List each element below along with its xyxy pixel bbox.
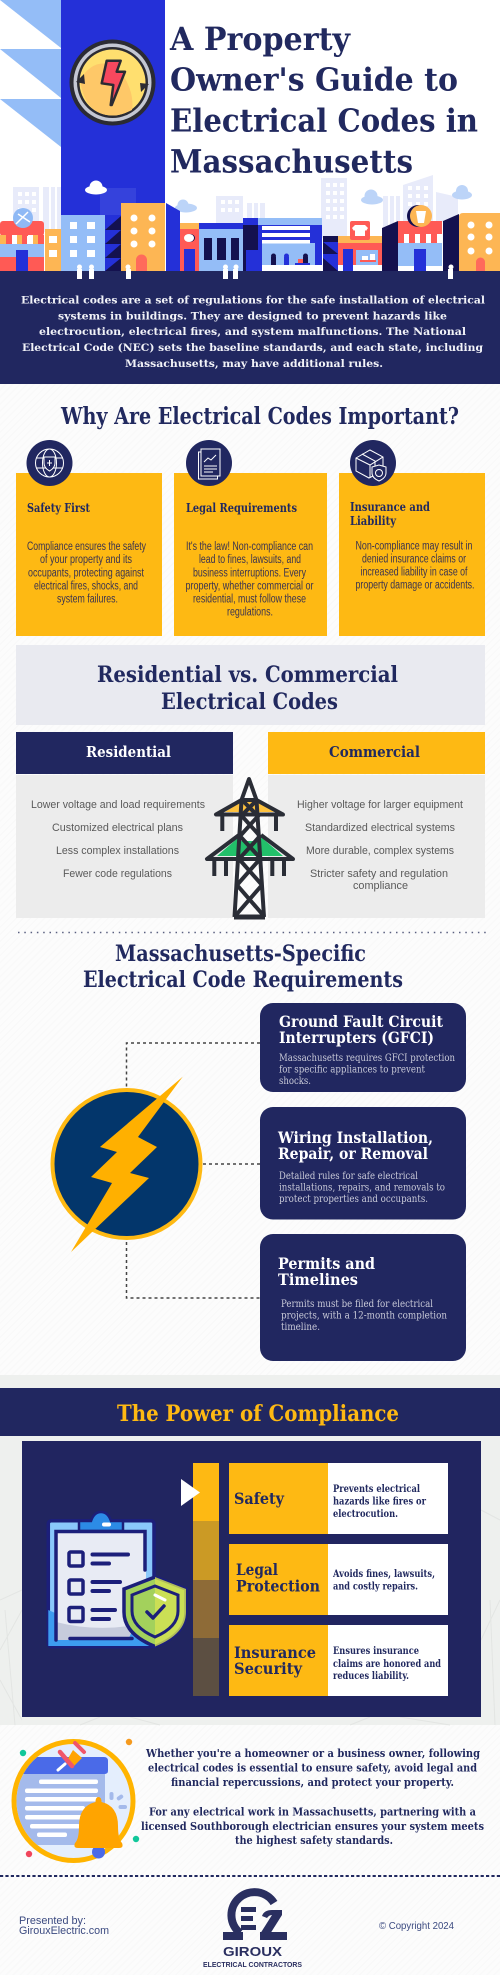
panel: wiring: Wiring Installation,	[277, 1128, 433, 1147]
intro band: Electrical Code (NEC) sets the baseline standards, and each state, including	[22, 342, 484, 354]
heading band: the power of compliance: The Power of Compliance	[117, 1401, 399, 1427]
row: legal protection: Protection	[236, 1576, 320, 1596]
row: insurance security	[229, 1625, 448, 1696]
panel: legal requirements: regulations.	[227, 607, 273, 619]
intro band: electrocution, electrical fires, and system malfunctions. The National	[39, 326, 466, 338]
orange right	[459, 213, 500, 271]
row: legal protection: Avoids fines, lawsuits,	[332, 1569, 435, 1580]
panel: GFCI: Interrupters (GFCI)	[279, 1028, 434, 1047]
panel: legal requirements: lead to fines, lawsuits, and	[199, 554, 301, 566]
title: Electrical Codes in	[170, 102, 478, 140]
panel: wiring: Detailed rules for safe electrical	[279, 1171, 418, 1182]
icon: clipboard with shield	[48, 1512, 186, 1647]
panel: residential vs commercial heading: Electrical Codes	[161, 689, 338, 715]
panel: safety first: electrical fires, shocks, and	[34, 580, 138, 592]
panel: residential vs commercial heading	[16, 645, 485, 725]
heading: massachusetts-specific: Electrical Code Requirements	[83, 967, 403, 993]
panel: wiring: protect properties and occupants.	[279, 1194, 428, 1205]
panel: wiring: Repair, or Removal	[278, 1144, 428, 1163]
panel: safety first	[16, 440, 162, 636]
panel: safety first: system failures.	[57, 594, 118, 606]
panel: commercial list: Commercial	[329, 743, 420, 761]
panel: residential list: Less complex installations	[56, 845, 179, 857]
intro band: Massachusetts, may have additional rules.	[125, 358, 383, 370]
shop 3	[398, 221, 442, 236]
panel: insurance and liability: Insurance and	[350, 500, 430, 514]
panel: safety first: Compliance ensures the safety	[27, 541, 146, 553]
shop 1	[0, 221, 44, 236]
panel: permits: Permits must be filed for electrical	[281, 1299, 433, 1310]
panel: residential list: Lower voltage and load requirements	[31, 799, 205, 811]
closing text: the highest safety standards.	[235, 1834, 393, 1847]
panel: residential list: Customized electrical plans	[52, 822, 183, 834]
icon: notice board with bell	[14, 1739, 139, 1860]
row: safety: hazards like fires or	[333, 1496, 427, 1508]
orange building	[121, 203, 165, 271]
panel: compliance	[22, 1441, 481, 1717]
heading: massachusetts-specific: Massachusetts-Specific	[115, 941, 366, 967]
row: safety: electrocution.	[333, 1509, 398, 1520]
footer: presented by	[19, 1915, 109, 1937]
row: insurance security: Ensures insurance	[333, 1646, 419, 1657]
panel: permits	[260, 1234, 466, 1361]
panel: commercial list: Standardized electrical systems	[305, 822, 455, 834]
panel: GFCI: Ground Fault Circuit	[279, 1012, 444, 1031]
panel: legal requirements	[174, 440, 327, 636]
panel: insurance and liability: denied insurance claims or	[362, 553, 466, 565]
t-shirt shop	[338, 236, 382, 243]
connectors	[126, 1043, 260, 1298]
arrow	[181, 1479, 200, 1506]
icon: transmission tower	[207, 779, 293, 917]
title: Owner's Guide to	[170, 61, 458, 99]
row: safety: Prevents electrical	[333, 1484, 420, 1495]
panel: permits: projects, with a 12-month completion	[281, 1310, 447, 1322]
panel: legal requirements: Legal Requirements	[186, 501, 297, 515]
panel: commercial list: compliance	[353, 880, 408, 892]
panel: commercial list: Stricter safety and regulation	[310, 868, 448, 880]
row: safety	[229, 1463, 448, 1534]
panel: commercial list	[268, 732, 485, 918]
light blue building	[61, 215, 105, 271]
icon: lightning circle	[52, 1077, 200, 1252]
panel: residential vs commercial heading: Residential vs. Commercial	[97, 662, 398, 688]
icon: lightning in circular arrows	[70, 40, 156, 126]
title	[169, 20, 478, 181]
panel: GFCI: Massachusetts requires GFCI protection	[279, 1053, 455, 1064]
title: A Property	[169, 20, 351, 58]
closing text	[141, 1747, 484, 1847]
heading band: the power of compliance	[0, 1388, 500, 1436]
row: legal protection	[229, 1544, 448, 1615]
title: Massachusetts	[170, 143, 413, 181]
panel: safety first: Safety First	[27, 501, 90, 515]
closing text: financial repercussions, and protect your property.	[171, 1776, 454, 1789]
icon: report document	[186, 440, 232, 486]
panel: permits: Timelines	[278, 1270, 358, 1289]
footer: presented by: GirouxElectric.com	[19, 1925, 109, 1937]
logo: giroux electrical contractors: ELECTRICAL CONTRACTORS	[203, 1962, 302, 1969]
panel: legal requirements: business interruptions. Every	[193, 567, 306, 579]
panel: legal requirements: It's the law! Non-compliance can	[186, 541, 313, 553]
panel: safety first: of your property and its	[40, 554, 132, 566]
header illustration: light blue triangles and blue column	[0, 0, 165, 216]
panel: legal requirements: property, whether commercial or	[186, 580, 314, 592]
panel: residential list	[16, 732, 233, 918]
intro band: Electrical codes are a set of regulations for the safe installation of electrical	[21, 294, 485, 306]
city skyline illustration	[0, 175, 500, 272]
footer: presented by: Presented by:	[19, 1915, 86, 1927]
panel: residential list: Residential	[86, 743, 171, 761]
shop 2	[180, 223, 199, 229]
panel: insurance and liability: Liability	[350, 514, 397, 528]
panel: GFCI	[260, 1003, 466, 1092]
panel: insurance and liability	[339, 440, 485, 636]
panel: commercial list: Higher voltage for larger equipment	[297, 799, 463, 811]
intro band: systems in buildings. They are designed to prevent hazards like	[58, 310, 447, 322]
heading: massachusetts-specific	[83, 941, 403, 993]
row: insurance security: claims are honored and	[333, 1659, 441, 1670]
logo: giroux electrical contractors	[203, 1892, 302, 1969]
row: legal protection: Legal	[236, 1560, 278, 1579]
row: insurance security: Insurance	[234, 1643, 316, 1662]
logo: giroux electrical contractors: GIROUX	[223, 1944, 282, 1959]
section divider	[18, 932, 488, 934]
panel: legal requirements: residential, must follow these	[193, 594, 306, 606]
row: insurance security: Security	[234, 1659, 303, 1678]
panel: commercial list: More durable, complex systems	[306, 845, 454, 857]
icon: globe with shield	[26, 440, 72, 486]
icon: box with shield	[350, 440, 396, 486]
panel: wiring: installations, repairs, and removals to	[279, 1182, 445, 1194]
footer divider	[0, 1875, 500, 1877]
storefront	[258, 218, 322, 225]
row: legal protection: and costly repairs.	[333, 1582, 418, 1592]
panel: permits: timeline.	[281, 1322, 320, 1333]
panel: insurance and liability: increased liability in case of	[360, 566, 468, 578]
panel: residential list: Fewer code regulations	[63, 868, 172, 880]
panel: wiring	[260, 1107, 466, 1220]
yellow small	[45, 229, 61, 271]
panel: GFCI: shocks.	[279, 1076, 311, 1087]
panel: safety first: occupants, protecting against	[28, 567, 145, 579]
row: insurance security: reduces liability.	[333, 1671, 409, 1682]
row: safety: Safety	[234, 1489, 285, 1508]
panel: GFCI: for specific appliances to prevent	[279, 1064, 425, 1076]
dark strip 2	[323, 236, 338, 271]
panel: permits: Permits and	[278, 1254, 375, 1273]
footer: copyright: © Copyright 2024	[379, 1921, 454, 1932]
timeline column	[193, 1463, 219, 1696]
intro band	[0, 264, 500, 384]
section background: compliance	[0, 1375, 500, 1725]
dark strip	[105, 215, 121, 271]
